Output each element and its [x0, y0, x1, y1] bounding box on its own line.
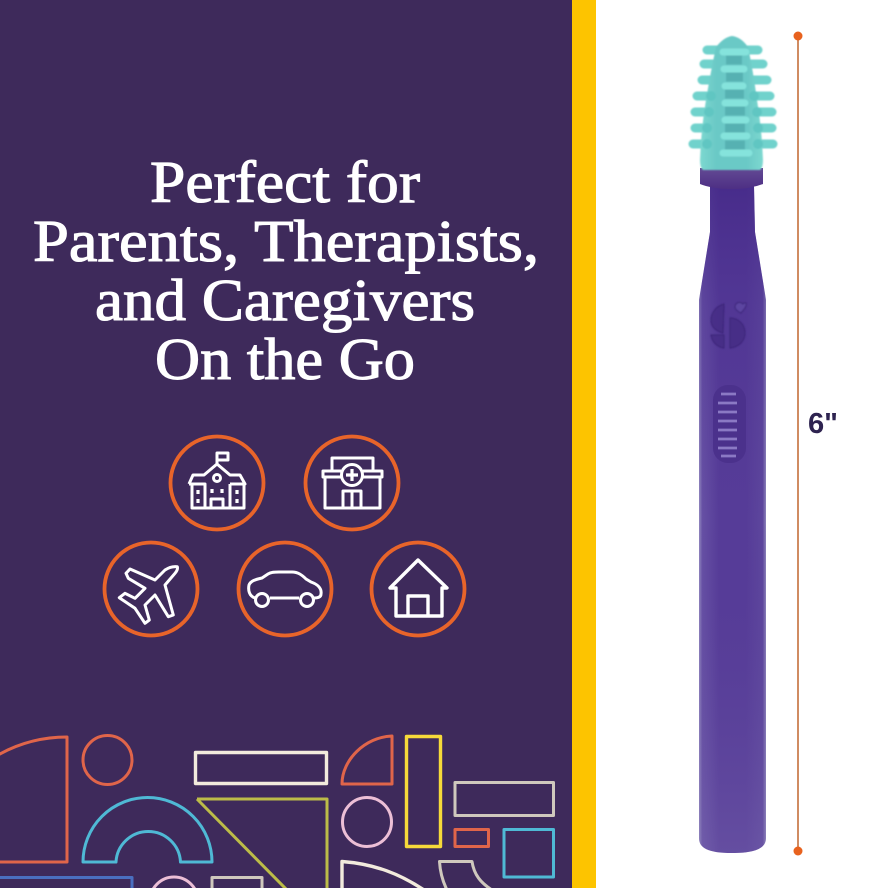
icon: airplane: [104, 542, 198, 636]
icon: school: [170, 436, 264, 530]
teal chew tip: [693, 36, 773, 170]
tip body: [700, 36, 763, 170]
dimension line: [794, 32, 802, 856]
icon: house: [372, 542, 464, 636]
yellow stripe: [572, 0, 596, 888]
chewy tube product: [693, 36, 773, 853]
tip shadows: [725, 60, 745, 145]
decorative geometric shapes: [0, 736, 554, 888]
tip ribs: [723, 52, 749, 153]
heading: Parents, Therapists,: [33, 208, 539, 274]
inner blobs: [702, 91, 763, 149]
embossed logo: [711, 302, 746, 348]
heading: and Caregivers: [95, 267, 475, 333]
finger grip: [713, 385, 746, 463]
heading: [33, 149, 539, 392]
handle shading: [699, 186, 766, 853]
heading: On the Go: [155, 326, 415, 392]
icon: car: [238, 542, 332, 636]
handle: [699, 186, 766, 853]
size label: 6": [808, 408, 838, 440]
tip spikes: [693, 50, 773, 144]
heading: Perfect for: [150, 149, 420, 215]
panel: purple background: [0, 0, 572, 888]
collar: [700, 168, 763, 189]
icon: hospital: [306, 436, 398, 530]
